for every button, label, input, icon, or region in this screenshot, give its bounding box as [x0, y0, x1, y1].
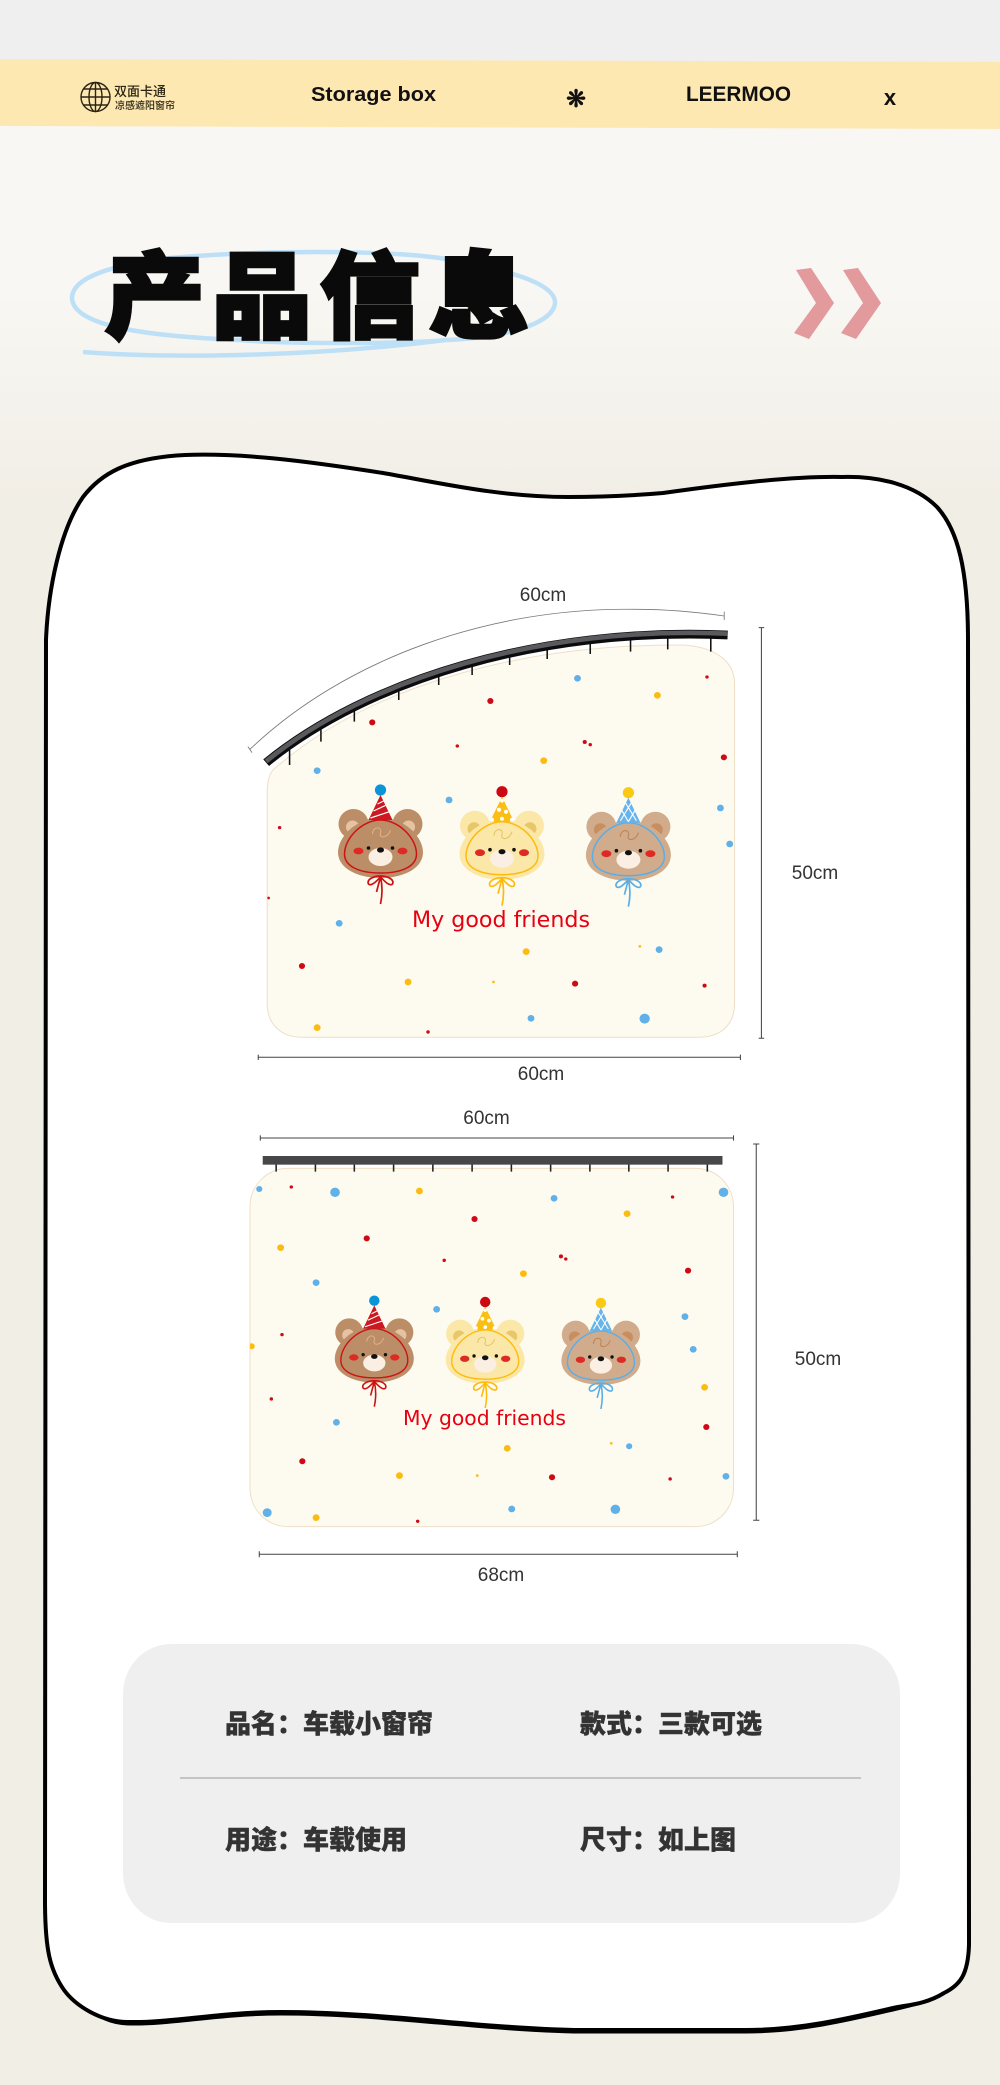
dimension lines [248, 609, 764, 1060]
curved curtain and dots [267, 645, 735, 1037]
bear: blue [586, 787, 671, 907]
label: 50cm right: 50cm [792, 863, 838, 884]
title text: 产品信息 [105, 245, 529, 350]
bear: red [338, 784, 423, 904]
curved window curtain diagram [248, 585, 838, 1085]
icon: globe logo [81, 82, 110, 112]
logo text: 凉感遮阳窗帘 [115, 99, 175, 112]
flat window curtain diagram [249, 1108, 841, 1586]
header text: LEERMOO: LEERMOO [686, 83, 791, 106]
panel: white wavy card [45, 455, 969, 2032]
logo text: 双面卡通 [114, 84, 166, 99]
text: My good friends: My good friends [403, 1406, 566, 1430]
icon: asterisk: ❋ [566, 85, 586, 113]
bear: yellow [460, 786, 544, 906]
label: 50cm right: 50cm [795, 1349, 841, 1370]
icon: x mark: x [884, 85, 897, 110]
label: 68cm bottom: 68cm [478, 1565, 524, 1586]
label: 60cm top: 60cm [463, 1108, 510, 1129]
label: 60cm bottom: 60cm [518, 1064, 564, 1085]
dimension lines [259, 1135, 759, 1557]
spec: style: 款式：三款可选 [580, 1709, 762, 1739]
flat curtain and dots [249, 1168, 734, 1527]
label: 60cm arc: 60cm [520, 585, 566, 606]
panel: product specs [123, 1644, 900, 1923]
spec: usage: 用途：车载使用 [225, 1825, 407, 1855]
icon: pink double chevron [794, 268, 881, 339]
spec: size: 尺寸：如上图 [580, 1825, 736, 1855]
bear: yellow [446, 1297, 525, 1408]
hand-drawn blue ellipse [72, 252, 555, 356]
header text: Storage box: Storage box [311, 84, 436, 106]
spec: product name: 品名：车载小窗帘 [225, 1709, 433, 1739]
bear: blue [561, 1298, 640, 1409]
straight rail with hooks [263, 1156, 722, 1172]
text: My good friends: My good friends [412, 908, 590, 933]
bear: red [335, 1295, 414, 1407]
header band [0, 59, 1000, 129]
curved rail with hooks [266, 633, 728, 765]
title with hand-drawn ellipse [72, 245, 555, 356]
